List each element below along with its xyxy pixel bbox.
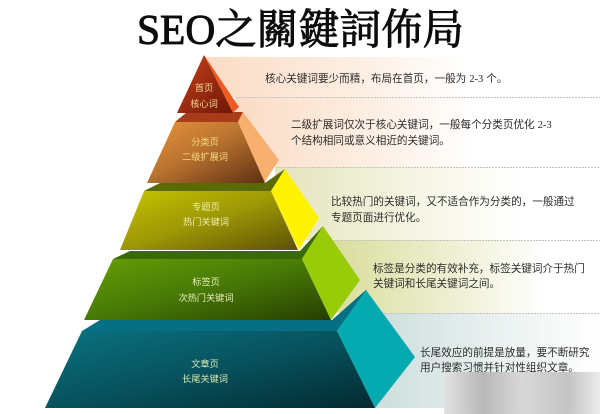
text block: tag keywords: 标签是分类的有效补充，标签关键词介于热门 bbox=[373, 262, 585, 275]
text block: long-tail keywords: 长尾效应的前提是放量，要不断研究 bbox=[420, 346, 590, 359]
label: tier 3 bbox=[183, 201, 229, 227]
pyramid tier 2: category page bbox=[147, 112, 279, 183]
pyramid tier 5: article page bbox=[45, 289, 415, 408]
text block: secondary keywords: 个结构相同或意义相近的关键词。 bbox=[291, 134, 450, 147]
label: tier 3: 热门关键词 bbox=[183, 216, 229, 227]
text block: long-tail keywords bbox=[420, 346, 590, 374]
text block: long-tail keywords: 用户搜索习惯并针对性组织文章。 bbox=[420, 361, 579, 374]
text block: core keywords: 核心关键词要少而精，布局在首页，一般为 2-3 个。 bbox=[265, 72, 508, 85]
label: tier 4: 次热门关键词 bbox=[178, 292, 234, 303]
label: tier 4 bbox=[178, 276, 234, 303]
pyramid tier 4: tag page bbox=[84, 226, 360, 320]
label: tier 1: 核心词 bbox=[190, 98, 218, 109]
label: tier 4: 标签页 bbox=[192, 276, 220, 287]
label: tier 5: 长尾关键词 bbox=[182, 373, 228, 384]
label: tier 2: 二级扩展词 bbox=[182, 151, 228, 162]
text block: popular keywords: 比较热门的关键词，又不适合作为分类的，一般通过 bbox=[331, 195, 575, 208]
label: tier 2: 分类页 bbox=[191, 136, 219, 147]
label: tier 5: 文章页 bbox=[191, 358, 219, 369]
pyramid tier 3: topic page bbox=[120, 169, 319, 250]
watermark smudge bbox=[444, 372, 600, 414]
label: tier 3: 专题页 bbox=[192, 201, 220, 212]
text block: tag keywords: 关键词和长尾关键词之间。 bbox=[373, 277, 500, 290]
label: tier 1 bbox=[190, 82, 218, 109]
text block: popular keywords bbox=[331, 195, 575, 224]
text block: popular keywords: 专题页面进行优化。 bbox=[331, 211, 426, 224]
label: tier 5 bbox=[182, 358, 228, 384]
label: tier 2 bbox=[182, 136, 228, 162]
text block: secondary keywords bbox=[291, 118, 552, 147]
label: tier 1: 首页 bbox=[195, 82, 213, 93]
title: SEO之關鍵詞佈局 bbox=[137, 8, 464, 54]
text block: secondary keywords: 二级扩展词仅次于核心关键词，一般每个分类页优化 2-3 bbox=[291, 118, 552, 131]
pyramid tier 1: home page bbox=[177, 55, 239, 113]
text block: tag keywords bbox=[373, 262, 585, 290]
panel: description band backgrounds bbox=[205, 57, 600, 408]
